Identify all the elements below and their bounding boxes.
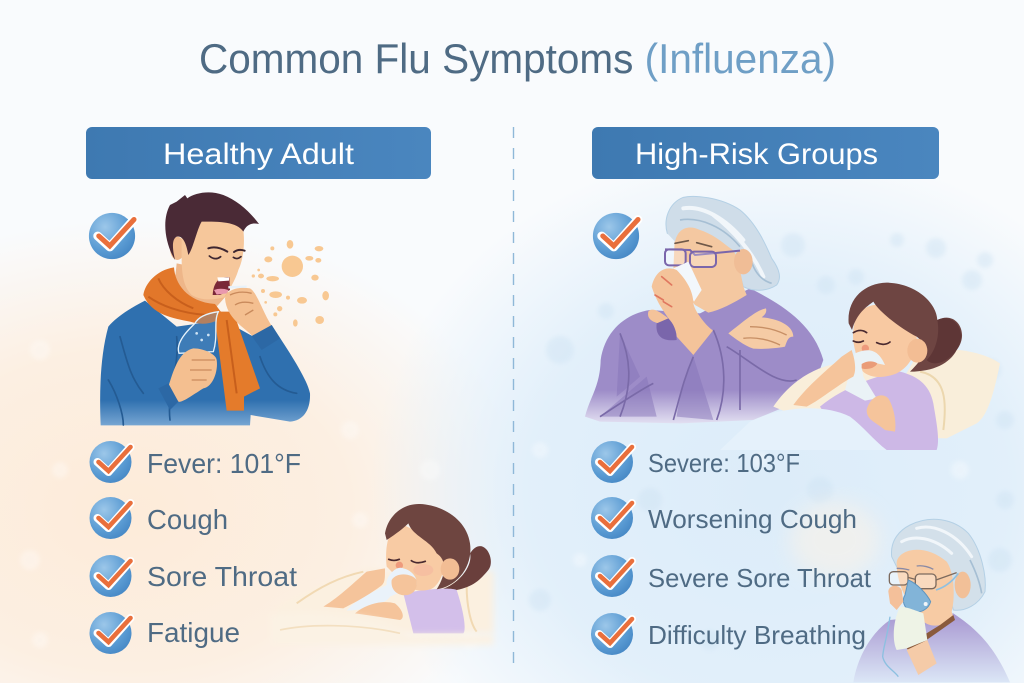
symptom list: healthy adult <box>90 441 301 654</box>
heading: healthy adult: Healthy Adult <box>163 138 355 171</box>
icon: top check <box>593 213 639 259</box>
child in bed <box>720 283 1000 450</box>
item: difficulty breathing: Difficulty Breathing <box>648 620 866 650</box>
item: severe fever <box>591 441 800 483</box>
item: severe sore throat: Severe Sore Throat <box>648 563 872 593</box>
item: cough: Cough <box>147 504 228 535</box>
item: sore throat: Sore Throat <box>147 561 297 592</box>
item: cough <box>90 497 228 539</box>
elderly woman <box>585 196 823 423</box>
item: severe sore throat <box>591 555 872 597</box>
item: severe fever: Severe: 103°F <box>648 448 800 478</box>
panel: healthy adult <box>86 127 493 654</box>
item: worsening cough: Worsening Cough <box>648 504 857 534</box>
item: difficulty breathing <box>591 613 866 655</box>
icon: top check <box>89 213 135 259</box>
icon: droplet spray <box>252 240 329 327</box>
heading: healthy adult <box>86 127 431 179</box>
item: fever <box>90 441 301 483</box>
symptom list: high-risk groups <box>591 441 872 655</box>
illustration: resting child <box>270 504 493 645</box>
illustration: elderly woman and child <box>585 196 1000 450</box>
item: worsening cough <box>591 497 857 539</box>
item: fatigue <box>90 612 240 654</box>
heading: high-risk groups: High-Risk Groups <box>635 138 878 171</box>
panel: high-risk groups <box>585 127 1010 682</box>
item: fever: Fever: 101°F <box>147 448 301 479</box>
item: fatigue: Fatigue <box>147 617 240 648</box>
divider <box>512 127 514 670</box>
illustration: coughing man <box>100 192 329 425</box>
title: Common Flu Symptoms (Influenza) <box>199 35 836 82</box>
illustration: woman with oxygen mask <box>853 519 1010 682</box>
item: sore throat <box>90 555 297 597</box>
heading: high-risk groups <box>592 127 939 179</box>
